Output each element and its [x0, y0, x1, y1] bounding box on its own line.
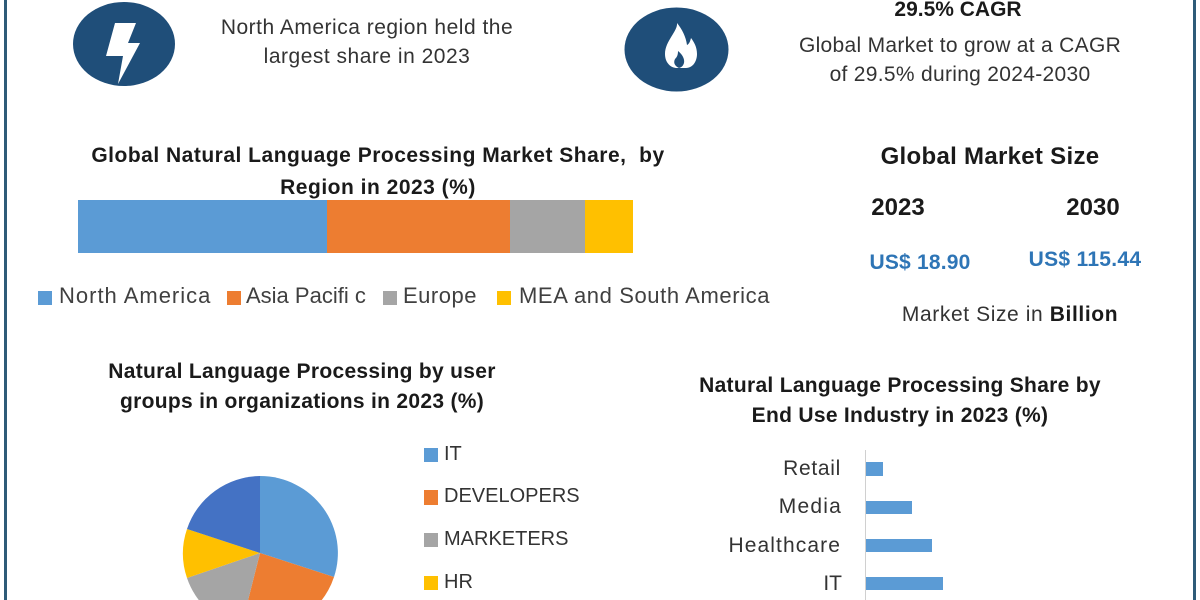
- note: market size unit: Market Size in Billion: [902, 303, 1118, 326]
- heading: end use: [699, 374, 1101, 427]
- bar: media: [779, 495, 912, 518]
- frame: right border: [1193, 0, 1196, 600]
- legend: region: Europe: [403, 283, 477, 308]
- pie chart: [182, 476, 338, 600]
- heading: end use: End Use Industry in 2023 (%): [752, 404, 1048, 427]
- bar chart: end use: [728, 450, 943, 600]
- icon: lightning bolt: [73, 2, 175, 86]
- heading: user groups: [108, 360, 496, 413]
- legend: user groups: IT: [444, 443, 462, 465]
- heading: global market size: Global Market Size: [881, 143, 1099, 170]
- heading: user groups: groups in organizations in 2023 (%): [120, 390, 484, 413]
- legend: user groups: HR: [444, 571, 473, 593]
- bar: retail: [783, 457, 883, 480]
- frame: left border: [4, 0, 7, 600]
- callout: north america: largest share in 2023: [264, 45, 470, 68]
- heading: region share: [91, 144, 665, 199]
- bar: media: Media: [779, 495, 842, 518]
- legend: user groups: [424, 443, 580, 593]
- stacked bar chart: [78, 200, 633, 253]
- icon: flame: [624, 8, 728, 92]
- value: 2023: US$ 18.90: [869, 251, 971, 274]
- legend: region: [38, 283, 770, 308]
- callout: north america: [221, 16, 513, 68]
- heading: region share: Region in 2023 (%): [280, 176, 476, 199]
- bar: IT: IT: [823, 572, 842, 595]
- legend: region: Asia Pacifi c: [246, 283, 366, 308]
- legend: region: MEA and South America: [519, 283, 770, 308]
- callout: CAGR detail: Global Market to grow at a CAGR: [799, 34, 1121, 57]
- legend: user groups: MARKETERS: [444, 528, 568, 550]
- heading: end use: Natural Language Processing Share by: [699, 374, 1101, 397]
- bar: healthcare: Healthcare: [728, 534, 841, 557]
- callout: north america: North America region held the: [221, 16, 513, 39]
- value: 2030: US$ 115.44: [1029, 248, 1141, 271]
- bar: retail: Retail: [783, 457, 841, 480]
- label: 2023: 2023: [871, 194, 925, 221]
- legend: user groups: DEVELOPERS: [444, 485, 580, 507]
- heading: user groups: Natural Language Processing by user: [108, 360, 496, 383]
- bar: healthcare: [728, 534, 932, 557]
- label: 2030: 2030: [1066, 194, 1120, 221]
- callout: CAGR detail: of 29.5% during 2024-2030: [830, 63, 1090, 86]
- callout: CAGR detail: [799, 34, 1121, 86]
- heading: region share: Global Natural Language Processing Market Share, by: [91, 144, 665, 167]
- bar: IT: [823, 572, 943, 595]
- legend: region: North America: [59, 283, 211, 308]
